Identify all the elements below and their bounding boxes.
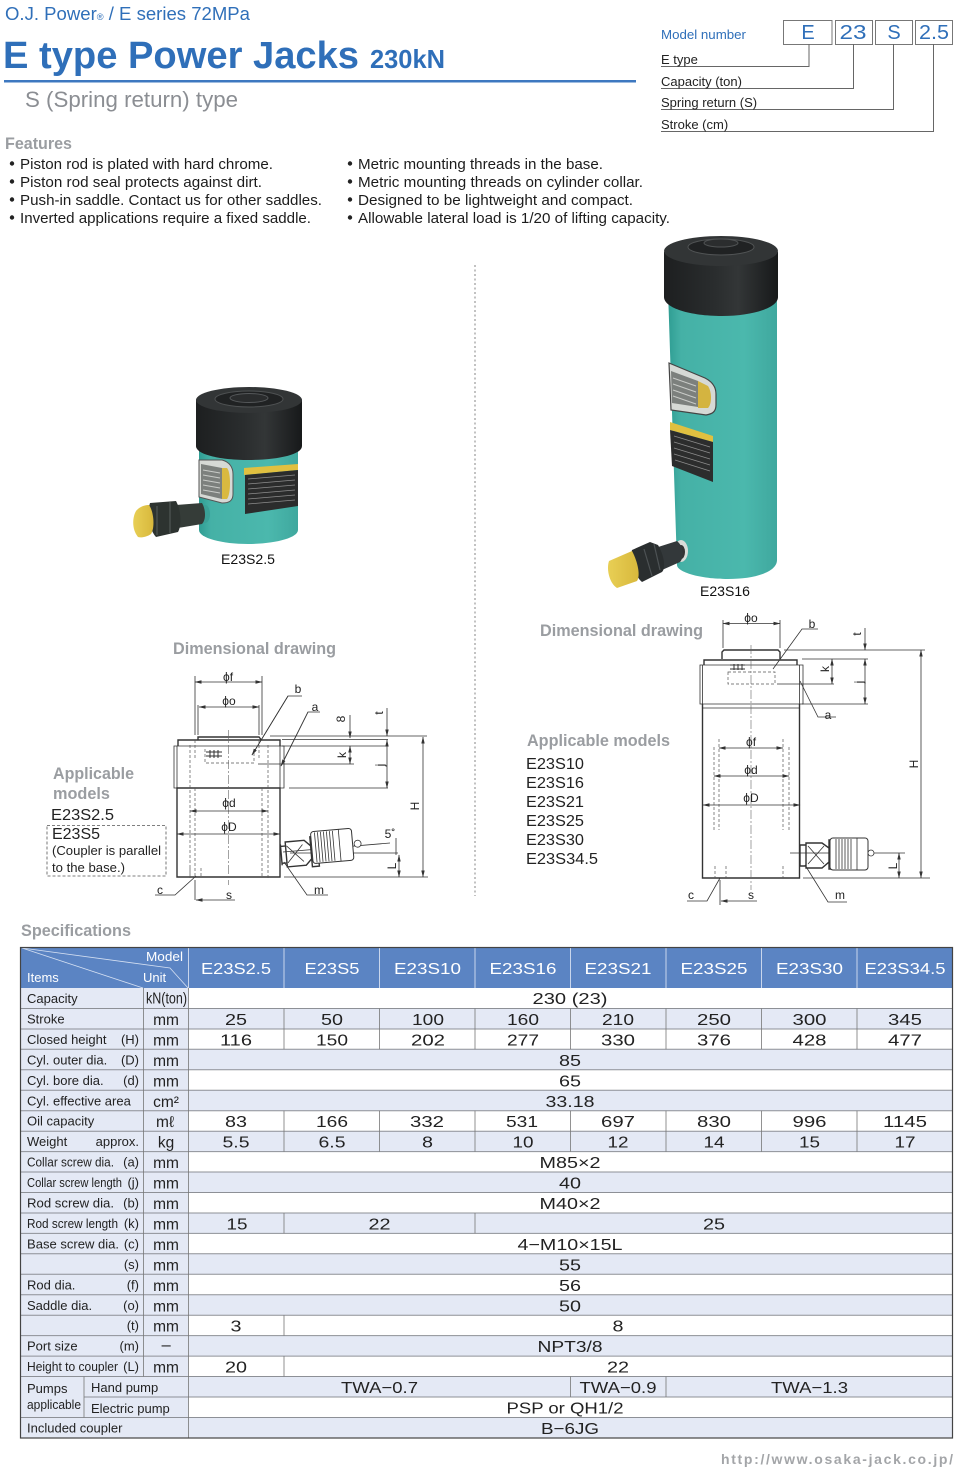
photo: short jack E23S2.5 <box>133 387 302 544</box>
row: oil capacity <box>27 1114 927 1131</box>
panel: features: Piston rod is plated with hard chrome. <box>20 156 273 173</box>
row: rod screw diameter <box>27 1196 601 1213</box>
panel: applicable models right: E23S21 <box>526 794 584 811</box>
panel: model number key: 2.5 <box>919 22 949 44</box>
table header: Items <box>27 970 59 985</box>
row: collar screw length: 40 <box>559 1176 581 1192</box>
panel: applicable models right: E23S25 <box>526 813 584 830</box>
panel: applicable models left: E23S5 <box>52 826 100 843</box>
row: cylinder bore diameter <box>27 1073 581 1090</box>
row: oil capacity: mℓ <box>156 1114 174 1131</box>
row: cylinder outer diameter: mm <box>153 1053 179 1070</box>
row: t: mm <box>153 1319 179 1336</box>
panel: model number key: Model number <box>661 27 747 42</box>
chart: dimensional drawing short jack: m <box>314 883 324 897</box>
caption: E23S2.5: E23S2.5 <box>221 551 275 567</box>
row: oil capacity: 830 <box>697 1114 731 1131</box>
panel: applicable models right <box>526 732 670 868</box>
row: rod screw length: 22 <box>368 1216 391 1234</box>
panel: applicable models left: Applicable <box>53 765 134 783</box>
row: cylinder outer diameter: (D) <box>121 1052 139 1067</box>
row: weight: 14 <box>704 1135 725 1152</box>
row: collar screw diameter: mm <box>153 1155 179 1172</box>
row: s <box>124 1257 581 1274</box>
panel: features: Features <box>5 135 72 153</box>
row: stroke: Stroke <box>27 1012 65 1026</box>
panel: applicable models left: E23S2.5 <box>51 807 114 824</box>
row: cylinder bore diameter: Cyl. bore dia. <box>27 1073 104 1088</box>
row: cylinder effective area: cm² <box>153 1094 179 1111</box>
panel: applicable models right: E23S34.5 <box>526 851 598 868</box>
table header: E23S25 <box>680 961 748 978</box>
row: port size: (m) <box>120 1339 139 1354</box>
row: stroke: 25 <box>225 1012 247 1029</box>
row: collar screw diameter: (a) <box>123 1155 139 1170</box>
panel: model number key: Capacity (ton) <box>661 74 742 89</box>
chart: dimensional drawing long jack: a <box>825 708 832 722</box>
panel: applicable models left <box>47 765 166 876</box>
row: port size <box>27 1338 603 1356</box>
row: stroke: 345 <box>888 1012 922 1029</box>
row: weight: 8 <box>422 1135 433 1152</box>
row: oil capacity: 332 <box>410 1114 444 1131</box>
row: pumps applicable: applicable <box>27 1397 81 1412</box>
table header: E23S2.5 <box>201 961 271 978</box>
row: height to coupler <box>27 1359 629 1377</box>
row: weight: 17 <box>894 1135 916 1152</box>
chart: dimensional drawing short jack: ϕD <box>221 820 237 834</box>
row: stroke: 160 <box>507 1012 539 1029</box>
series heading: O.J. Power ® / E series 72MPa <box>5 4 251 24</box>
chart: dimensional drawing long jack: s <box>748 888 754 902</box>
chart: dimensional drawing short jack: 5˚ <box>385 827 395 841</box>
row: pumps applicable <box>27 1380 848 1418</box>
chart: dimensional drawing long jack: ϕD <box>743 791 759 805</box>
row: saddle diameter: Saddle dia. <box>27 1298 92 1313</box>
row: height to coupler: 20 <box>225 1360 247 1377</box>
chart: dimensional drawing long jack <box>687 611 930 905</box>
chart: dimensional drawing short jack: t <box>372 711 386 715</box>
row: capacity: Capacity <box>27 991 78 1006</box>
row: saddle diameter <box>27 1298 581 1315</box>
row: collar screw length: Collar screw length <box>27 1175 122 1190</box>
chart: dimensional drawing long jack: ϕo <box>744 611 758 625</box>
row: rod diameter <box>27 1277 581 1295</box>
row: closed height: mm <box>153 1032 179 1050</box>
row: base screw diameter: Base screw dia. <box>27 1236 119 1251</box>
row: weight: approx. <box>96 1134 139 1149</box>
chart: dimensional drawing short jack: a <box>312 700 319 714</box>
panel: applicable models left: models <box>53 785 110 803</box>
row: oil capacity: Oil capacity <box>27 1114 95 1129</box>
chart: dimensional drawing short jack: c <box>157 883 163 897</box>
row: rod diameter: mm <box>153 1278 179 1295</box>
row: rod screw length: mm <box>153 1216 179 1234</box>
row: collar screw length: (j) <box>127 1175 139 1190</box>
chart: dimensional drawing long jack: b <box>809 617 816 631</box>
chart: dimensional drawing long jack: t <box>850 632 864 636</box>
row: stroke: 250 <box>697 1012 731 1029</box>
row: closed height: 477 <box>888 1032 922 1050</box>
row: rod screw length: (k) <box>124 1216 139 1231</box>
chart: dimensional drawing short jack: H <box>408 802 422 810</box>
row: stroke: 300 <box>792 1012 827 1029</box>
chart: dimensional drawing short jack: 8 <box>334 715 348 722</box>
table header: E23S34.5 <box>864 961 946 978</box>
row: rod screw diameter: (b) <box>123 1196 139 1210</box>
chart: dimensional drawing short jack: ϕd <box>222 796 236 810</box>
row: stroke <box>27 1012 922 1029</box>
row: cylinder bore diameter: 65 <box>559 1073 581 1090</box>
chart: dimensional drawing short jack: ϕf <box>223 670 234 684</box>
row: capacity: 230 (23) <box>532 991 608 1008</box>
panel: model number key <box>661 20 952 132</box>
panel: applicable models right: E23S30 <box>526 832 584 849</box>
row: weight: 5.5 <box>222 1135 250 1152</box>
chart: dimensional drawing long jack: L <box>886 862 900 869</box>
row: included coupler <box>27 1420 599 1438</box>
panel: applicable models left: to the base.) <box>52 860 125 875</box>
row: closed height: (H) <box>121 1032 139 1047</box>
heading: dimensional drawing left: Dimensional drawing <box>173 640 336 658</box>
row: oil capacity: 166 <box>316 1114 348 1131</box>
chart: dimensional drawing long jack: k <box>818 665 832 672</box>
row: weight: 12 <box>608 1135 629 1152</box>
row: cylinder outer diameter: 85 <box>559 1053 581 1070</box>
row: height to coupler: 22 <box>607 1360 629 1377</box>
row: pumps applicable: PSP or QH1/2 <box>506 1400 624 1418</box>
row: rod screw length: Rod screw length <box>27 1216 118 1231</box>
chart: dimensional drawing long jack: H <box>907 760 921 768</box>
row: oil capacity: 697 <box>601 1114 635 1131</box>
row: rod screw length: 15 <box>226 1216 248 1234</box>
row: port size: − <box>160 1338 172 1355</box>
heading: dimensional drawing right: Dimensional drawing <box>540 622 703 640</box>
table header: Model <box>146 949 183 964</box>
table grid <box>20 948 953 1438</box>
panel: applicable models right: Applicable models <box>527 732 670 750</box>
panel: model number key: 23 <box>840 22 866 44</box>
row: stroke: 210 <box>602 1012 634 1029</box>
row: capacity <box>27 990 608 1008</box>
chart: dimensional drawing short jack: ϕo <box>222 694 236 708</box>
row: t: 3 <box>230 1319 242 1336</box>
row: port size: NPT3/8 <box>538 1339 603 1356</box>
panel: features: Push-in saddle. Contact us for other saddles. <box>20 192 322 209</box>
panel: features <box>5 135 670 227</box>
title rule <box>4 80 636 82</box>
icon: tilted coupler <box>279 827 363 869</box>
row: collar screw length <box>27 1175 581 1192</box>
chart: dimensional drawing long jack: c <box>688 888 694 902</box>
row: rod diameter: 56 <box>559 1278 581 1295</box>
title: 230kN <box>370 44 445 74</box>
chart: dimensional drawing long jack: j <box>852 681 866 684</box>
row: base screw diameter: mm <box>153 1237 179 1254</box>
panel: specifications table <box>20 948 953 1438</box>
chart: dimensional drawing long jack: ϕd <box>744 763 758 777</box>
row: cylinder bore diameter: mm <box>153 1073 179 1090</box>
row: rod screw length <box>27 1216 725 1234</box>
panel: model number key: S <box>887 22 901 44</box>
row: pumps applicable: TWA−1.3 <box>771 1380 848 1397</box>
chart: dimensional drawing long jack: ϕf <box>746 735 757 749</box>
row: saddle diameter: (o) <box>123 1298 139 1313</box>
row: base screw diameter <box>27 1236 623 1254</box>
row: collar screw length: mm <box>153 1176 179 1192</box>
row: collar screw diameter <box>27 1155 601 1172</box>
table header: Unit <box>143 970 167 985</box>
row: height to coupler: Height to coupler <box>27 1359 119 1374</box>
row: s: mm <box>153 1257 179 1274</box>
chart: dimensional drawing short jack: s <box>226 888 232 902</box>
row: collar screw diameter: M85×2 <box>540 1155 601 1172</box>
panel: features: Allowable lateral load is 1/20 of lifting capacity. <box>358 210 670 227</box>
panel: features: Metric mounting threads on cylinder collar. <box>358 174 643 191</box>
caption: E23S16: E23S16 <box>700 583 750 599</box>
row: stroke: 50 <box>321 1012 343 1029</box>
row: cylinder outer diameter: Cyl. outer dia. <box>27 1052 107 1067</box>
row: weight: kg <box>158 1135 174 1152</box>
row: weight: 6.5 <box>318 1135 346 1152</box>
row: weight: 15 <box>799 1135 820 1152</box>
panel: applicable models left: (Coupler is parallel <box>52 843 161 858</box>
row: closed height: 277 <box>507 1032 539 1050</box>
row: oil capacity: 1145 <box>883 1114 927 1131</box>
row: closed height <box>27 1032 922 1050</box>
panel: features: Piston rod seal protects against dirt. <box>20 174 262 191</box>
panel: features: Inverted applications require a fixed saddle. <box>20 210 311 227</box>
row: stroke: 100 <box>412 1012 444 1029</box>
panel: applicable models right: E23S10 <box>526 756 584 773</box>
row: rod screw diameter: Rod screw dia. <box>27 1196 114 1210</box>
row: oil capacity: 83 <box>225 1114 247 1131</box>
chart: dimensional drawing long jack: m <box>835 888 845 902</box>
row: included coupler: B−6JG <box>541 1421 599 1438</box>
table header: E23S21 <box>584 961 652 978</box>
row: cylinder effective area <box>27 1093 595 1111</box>
table header: E23S5 <box>304 961 360 978</box>
panel: model number key: Stroke (cm) <box>661 117 728 132</box>
row: height to coupler: (L) <box>123 1359 139 1374</box>
row: closed height: 150 <box>316 1032 348 1050</box>
row: capacity: kN(ton) <box>146 990 187 1008</box>
row: collar screw diameter: Collar screw dia. <box>27 1155 114 1170</box>
table header <box>20 948 952 988</box>
row: t <box>127 1318 624 1336</box>
chart: dimensional drawing short jack: k <box>335 751 349 758</box>
row: cylinder effective area: 33.18 <box>546 1094 595 1111</box>
row: pumps applicable: Electric pump <box>91 1401 170 1416</box>
row: closed height: 428 <box>792 1032 827 1050</box>
row: oil capacity: 996 <box>792 1114 827 1131</box>
panel: model number key: E <box>801 22 815 44</box>
row: included coupler: Included coupler <box>27 1420 123 1436</box>
table header: E23S30 <box>776 961 843 978</box>
row: rod diameter: (f) <box>127 1277 139 1292</box>
icon: straight coupler <box>800 838 874 870</box>
panel: features: Designed to be lightweight and compact. <box>358 192 633 209</box>
table header: E23S16 <box>490 961 557 978</box>
panel: applicable models right: E23S16 <box>526 775 584 792</box>
row: cylinder effective area: Cyl. effective area <box>27 1093 132 1108</box>
row: weight: 10 <box>512 1135 534 1152</box>
title: E type Power Jacks <box>3 35 359 77</box>
row: cylinder outer diameter <box>27 1052 581 1070</box>
footer url: http://www.osaka-jack.co.jp/ <box>721 1451 953 1467</box>
row: rod screw diameter: mm <box>153 1196 179 1213</box>
row: rod diameter: Rod dia. <box>27 1277 75 1292</box>
heading: specifications: Specifications <box>21 922 131 940</box>
row: base screw diameter: (c) <box>124 1236 139 1251</box>
row: pumps applicable: TWA−0.7 <box>341 1380 418 1397</box>
row: weight: Weight <box>27 1134 68 1149</box>
row: rod screw diameter: M40×2 <box>540 1196 601 1213</box>
row: rod screw length: 25 <box>703 1216 725 1234</box>
row: stroke: mm <box>153 1012 179 1029</box>
row: s: 55 <box>559 1257 581 1274</box>
chart: dimensional drawing short jack: j <box>373 764 387 767</box>
row: closed height: 376 <box>697 1032 731 1050</box>
photo: long jack E23S16 <box>608 236 778 588</box>
row: pumps applicable: Hand pump <box>91 1380 158 1395</box>
chart: dimensional drawing short jack <box>155 670 428 902</box>
panel: features: Metric mounting threads in the base. <box>358 156 603 173</box>
table header: E23S10 <box>394 961 461 978</box>
subtitle: S (Spring return) type <box>25 87 238 112</box>
panel: model number key: Spring return (S) <box>661 95 757 110</box>
chart: dimensional drawing short jack: b <box>295 682 302 696</box>
row: s: (s) <box>124 1257 139 1272</box>
row: t: (t) <box>127 1318 139 1333</box>
row: closed height: 330 <box>601 1032 635 1050</box>
row: oil capacity: 531 <box>506 1114 538 1131</box>
row: t: 8 <box>612 1319 624 1336</box>
row: closed height: Closed height <box>27 1032 107 1047</box>
chart: dimensional drawing short jack: L <box>385 862 399 869</box>
row: base screw diameter: 4−M10×15L <box>518 1237 623 1254</box>
row: height to coupler: mm <box>153 1360 179 1377</box>
table row backgrounds <box>20 988 952 1438</box>
row: saddle diameter: mm <box>153 1298 179 1315</box>
row: pumps applicable: TWA−0.9 <box>580 1380 657 1397</box>
row: port size: Port size <box>27 1339 78 1354</box>
panel: model number key: E type <box>661 52 698 67</box>
row: closed height: 202 <box>411 1032 445 1050</box>
row: saddle diameter: 50 <box>559 1298 581 1315</box>
row: cylinder bore diameter: (d) <box>123 1073 139 1088</box>
row: closed height: 116 <box>220 1032 252 1050</box>
row: weight <box>27 1134 916 1152</box>
row: pumps applicable: Pumps <box>27 1381 68 1396</box>
